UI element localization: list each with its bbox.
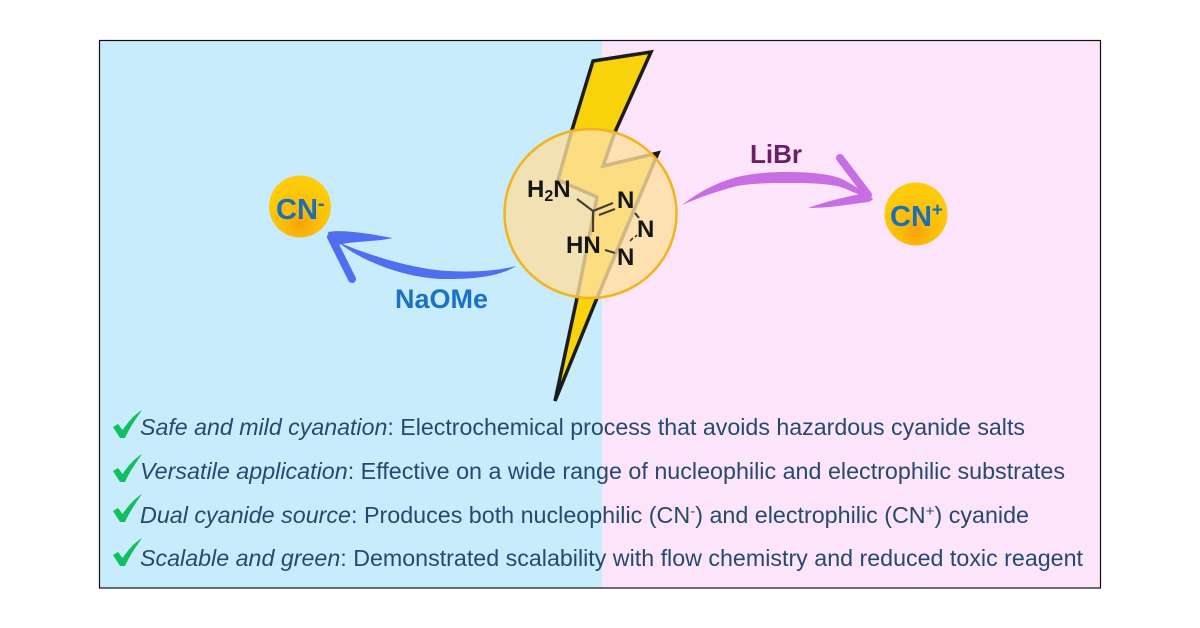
benefit 2: Versatile application: Effective on a wide range of nucleophilic and electrophilic substrates [140,458,1065,484]
panel: right pink background [602,41,1100,588]
CN+ ball: CN [890,201,932,233]
benefit 3: + [926,503,935,520]
benefit 4: Scalable and green: Demonstrated scalability with flow chemistry and reduced toxic reagent [140,545,1084,571]
atom labels: N [553,176,571,203]
CN- ball: - [318,193,325,215]
label: NaOMe: NaOMe [395,284,488,314]
icon: lightning bolt [555,52,658,401]
label: LiBr: LiBr [750,139,802,169]
arrow: LiBr to CN+ [682,158,873,208]
icon: check [113,538,142,566]
icon: check [113,454,142,482]
molecule: aminotetrazole [527,176,654,271]
benefit 1: Safe and mild cyanation: Electrochemical process that avoids hazardous cyanide salts [140,414,1025,440]
CN- ball: CN [276,194,318,226]
benefit 3: ) and electrophilic (CN [695,502,926,528]
benefit 3: - [690,503,695,520]
panel: left blue background [100,41,602,588]
atom labels: H [527,176,544,203]
CN+ ball: + [932,200,943,221]
molecule: aminotetrazole: N [617,187,634,214]
benefit 3: ) cyanide [935,502,1029,528]
bonds [577,199,639,253]
icon: check [113,494,142,522]
arrow: NaOMe to CN- [328,231,516,279]
benefits list [113,410,1084,571]
molecule: aminotetrazole: HN [566,232,601,259]
benefit 3 [113,494,1029,528]
molecule circle [504,129,676,298]
atom labels: 2 [544,188,553,205]
CN+ ball [884,182,948,246]
molecule: aminotetrazole: N [617,244,634,271]
CN- ball [269,176,331,238]
icon: check [113,410,142,438]
benefit 3: Dual cyanide source: Produces both nucleophilic (CN [140,502,686,528]
molecule: aminotetrazole: N [637,216,654,243]
panel border [100,40,1100,588]
